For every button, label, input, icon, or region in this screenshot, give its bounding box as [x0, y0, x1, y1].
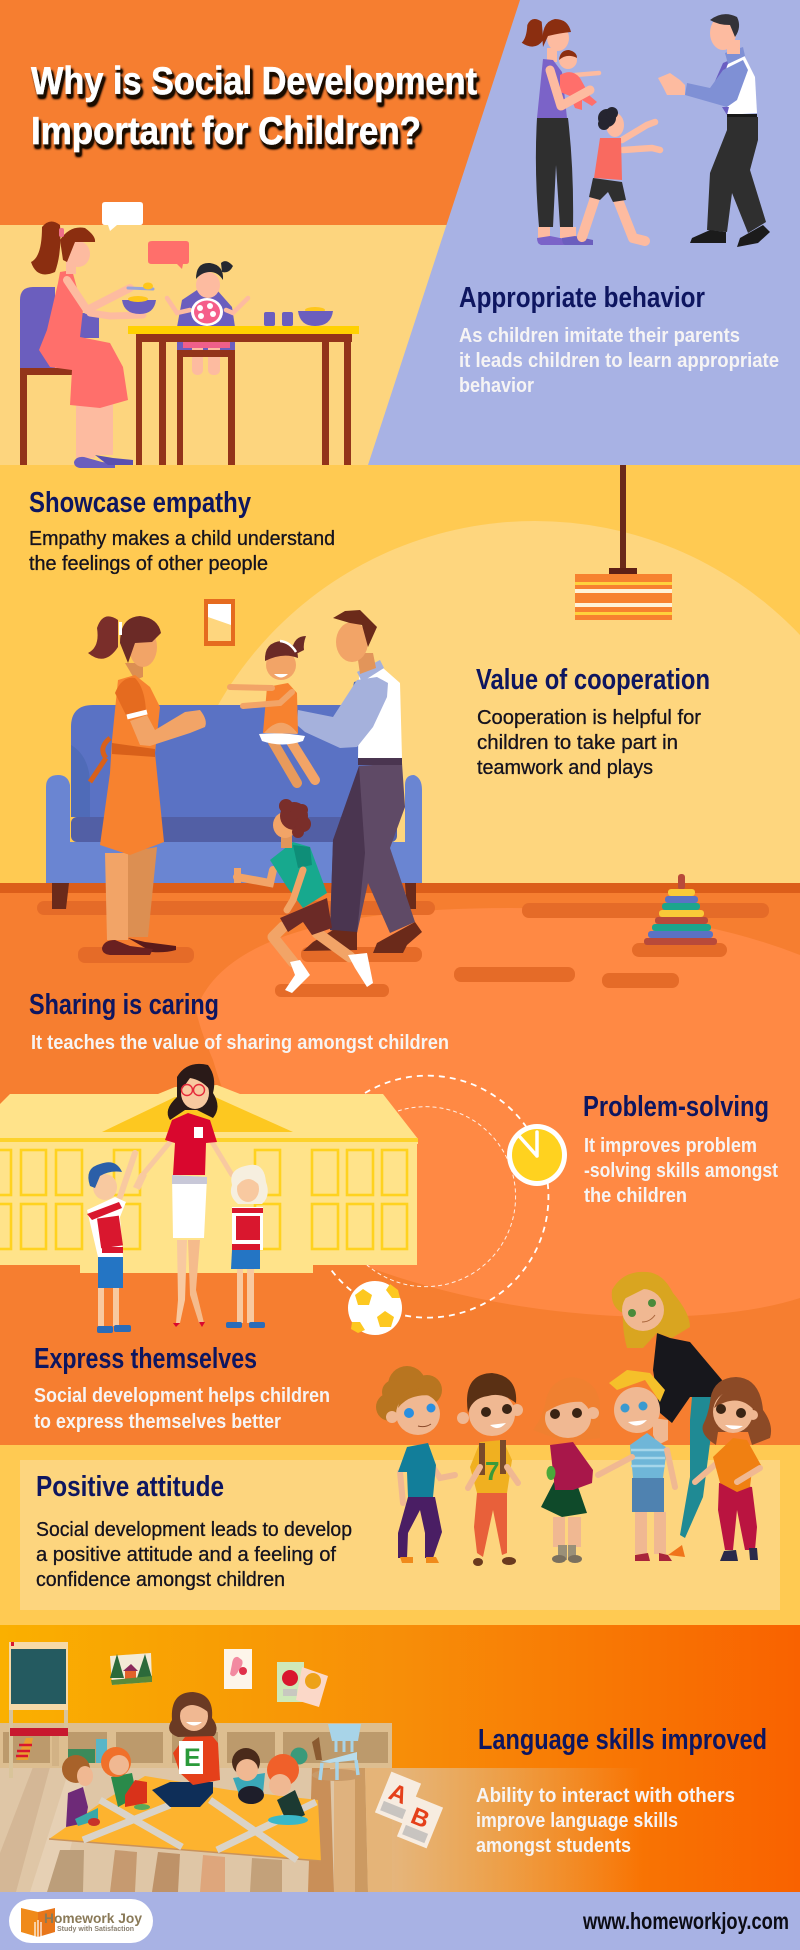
speech bubble coral	[148, 241, 189, 269]
text: positive attitude body: Social development leads to develop	[36, 1519, 352, 1541]
text: language skills body: amongst students	[476, 1835, 631, 1857]
classroom teacher with E card	[152, 1692, 220, 1807]
icon: clock	[507, 1124, 567, 1186]
child in high chair	[167, 261, 248, 465]
logo: Homework Joy: Study with Satisfaction	[57, 1926, 134, 1933]
panel: orange floor	[0, 883, 800, 1445]
text: problem-solving body: It improves problem	[584, 1135, 757, 1157]
text: language skills body: improve language skills	[476, 1810, 678, 1832]
blonde teacher	[612, 1272, 722, 1557]
hearts picture	[224, 1649, 252, 1689]
fruit cards	[277, 1662, 328, 1707]
text: value of cooperation body: children to take part in	[477, 732, 678, 754]
child: red hair girl	[533, 1377, 600, 1563]
text: appropriate behavior body: behavior	[459, 375, 534, 397]
mother with baby	[522, 19, 599, 245]
text: positive attitude body: confidence amongst children	[36, 1569, 285, 1591]
logo: Homework Joy	[9, 1899, 153, 1943]
illustration: teacher and two pupils	[87, 1064, 268, 1333]
icon: wall frame	[204, 599, 235, 646]
girl	[226, 1165, 268, 1328]
panel: header background	[0, 0, 800, 465]
panel: living room wall	[0, 465, 800, 883]
chalkboard	[9, 1642, 68, 1778]
red table and abacus	[10, 1728, 68, 1766]
classroom teacher with E card: E	[184, 1744, 201, 1772]
boy reaching	[582, 107, 660, 241]
icon: ring stacking toy	[644, 874, 717, 945]
illustration: school building	[0, 1085, 418, 1273]
mother seated	[31, 221, 156, 468]
text: appropriate behavior body: As children imitate their parents	[459, 325, 740, 347]
boy	[87, 1153, 135, 1333]
blue chair	[312, 1724, 362, 1781]
text: value of cooperation body: Cooperation is helpful for	[477, 707, 701, 729]
text: language skills body	[476, 1785, 735, 1857]
illustration: mother in orange dress	[88, 616, 206, 955]
panel: footer background	[0, 1892, 800, 1950]
shelf	[0, 1723, 392, 1768]
illustration: father lifting daughter	[230, 610, 422, 953]
seated children	[62, 1747, 308, 1827]
heading: express themselves: Express themselves	[34, 1343, 257, 1375]
speech bubble white	[102, 202, 143, 231]
heading: value of cooperation: Value of cooperation	[476, 664, 710, 696]
text: express themselves body	[34, 1385, 330, 1433]
icon: AB letter cards	[375, 1772, 443, 1848]
text: language skills body: Ability to interact with others	[476, 1785, 735, 1807]
chair	[20, 287, 99, 465]
icon: hanging lamp	[575, 465, 672, 620]
text: appropriate behavior body	[459, 325, 779, 397]
text: showcase empathy body: the feelings of other people	[29, 553, 268, 575]
text: positive attitude body: a positive attitude and a feeling of	[36, 1544, 336, 1566]
child: number seven shirt	[457, 1373, 523, 1566]
dining table	[128, 307, 359, 465]
title	[31, 60, 477, 153]
illustration: teacher with five children	[376, 1272, 771, 1566]
title: Why is Social Development	[31, 60, 477, 103]
text: problem-solving body	[584, 1135, 778, 1207]
child: brown hair girl	[695, 1377, 771, 1561]
title: Important for Children?	[31, 110, 421, 153]
icon: AB letter cards: A	[385, 1778, 411, 1810]
text: problem-solving body: -solving skills amongst	[584, 1160, 778, 1182]
illustration: mother feeding child	[20, 202, 359, 468]
text: showcase empathy body: Empathy makes a child understand	[29, 528, 335, 550]
logo: Homework Joy: Homework Joy	[44, 1910, 142, 1926]
heading: appropriate behavior: Appropriate behavior	[459, 282, 705, 314]
text: problem-solving body: the children	[584, 1185, 687, 1207]
panel: language skills background	[0, 1625, 800, 1892]
illustration: dashed orbit lines	[329, 1076, 548, 1318]
floor stripes	[0, 1767, 392, 1892]
illustration: sofa	[46, 705, 422, 909]
heading: sharing is caring: Sharing is caring	[29, 989, 219, 1021]
text: value of cooperation body: teamwork and plays	[477, 757, 653, 779]
illustration: running boy	[234, 799, 373, 993]
illustration: family greeting	[522, 14, 770, 247]
heading: showcase empathy: Showcase empathy	[29, 487, 251, 519]
child: number seven shirt: 7	[485, 1456, 499, 1486]
icon: AB letter cards: B	[407, 1802, 433, 1834]
text: express themselves body: to express themselves better	[34, 1411, 281, 1433]
text: express themselves body: Social development helps children	[34, 1385, 330, 1407]
text: positive attitude body	[36, 1519, 352, 1591]
panel: positive attitude background	[0, 1445, 800, 1625]
text: sharing is caring body: It teaches the value of sharing amongst children	[31, 1032, 449, 1054]
text: value of cooperation body	[477, 707, 701, 779]
landscape picture	[110, 1653, 152, 1685]
rug	[49, 1776, 321, 1861]
child: blond boy	[598, 1370, 675, 1561]
teacher	[133, 1064, 232, 1327]
icon: open book	[21, 1908, 55, 1937]
text: appropriate behavior body: it leads children to learn appropriate	[459, 350, 779, 372]
heading: positive attitude: Positive attitude	[36, 1471, 224, 1503]
illustration: classroom	[0, 1642, 392, 1892]
icon: football	[348, 1281, 402, 1335]
father	[658, 14, 770, 247]
child: curly hair	[376, 1366, 455, 1563]
text: showcase empathy body	[29, 528, 335, 575]
daughter	[230, 636, 315, 783]
